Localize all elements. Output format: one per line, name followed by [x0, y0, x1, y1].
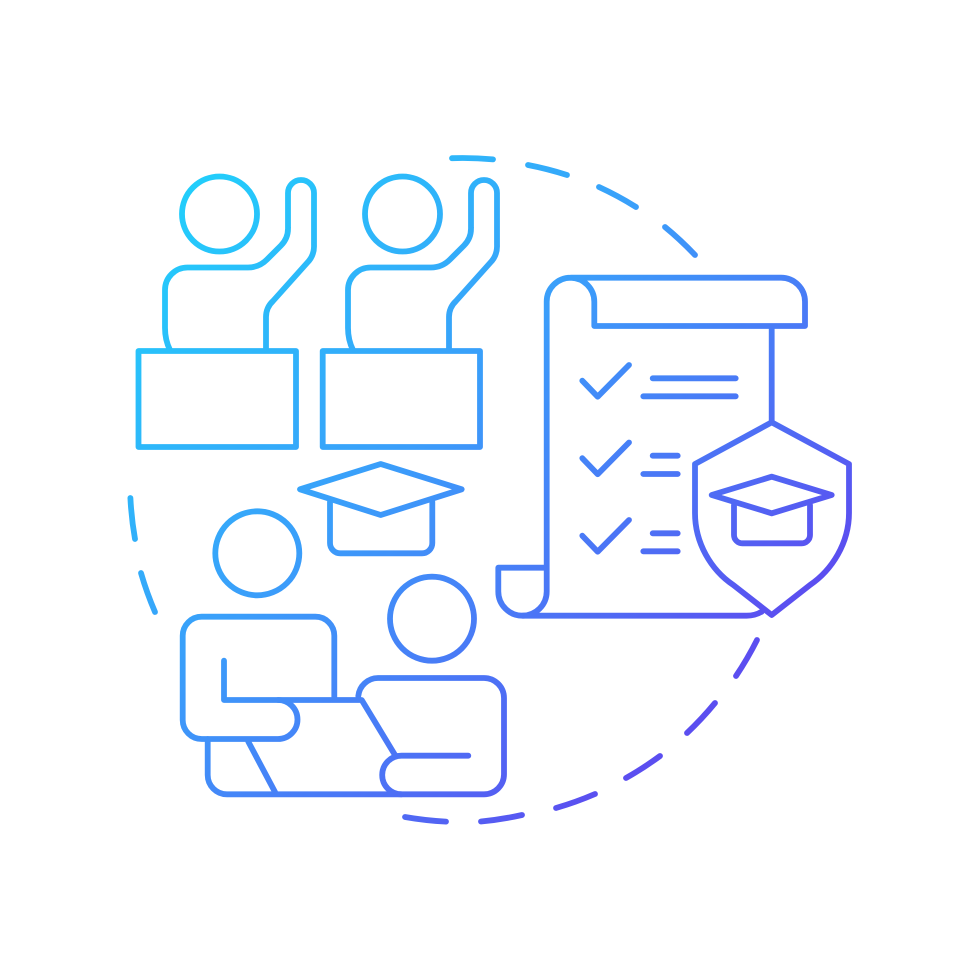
head	[182, 176, 257, 252]
shield outline	[695, 422, 849, 615]
cap board	[300, 464, 462, 515]
student 1 with raised hand at desk	[138, 176, 314, 447]
teacher head	[215, 511, 299, 595]
checklist item 2	[582, 442, 678, 474]
scroll outline	[498, 278, 805, 616]
teacher torso and arm	[183, 617, 334, 739]
checklist item 3	[582, 520, 678, 552]
scroll bottom edge	[523, 612, 762, 616]
shield cap board	[712, 477, 832, 513]
student 2 with raised hand at desk	[323, 176, 497, 447]
policy scroll	[498, 278, 805, 616]
desk	[138, 351, 296, 447]
checklist item 1	[582, 365, 736, 397]
student arm	[382, 756, 468, 794]
body and raised arm	[165, 180, 314, 350]
head	[365, 176, 440, 252]
cap base	[330, 502, 432, 553]
shield with graduation cap	[695, 422, 849, 615]
laptop top edge	[224, 661, 395, 755]
teacher and student with laptop	[183, 511, 504, 794]
dashed circle outline	[130, 158, 757, 822]
graduation cap	[300, 464, 462, 553]
seated lower body and student torso	[208, 678, 504, 794]
desk	[323, 351, 480, 447]
teacher leg	[248, 742, 275, 792]
shield cap base	[734, 505, 810, 543]
student head	[390, 577, 474, 661]
body and raised arm	[348, 180, 497, 350]
scroll right edge	[769, 328, 775, 421]
